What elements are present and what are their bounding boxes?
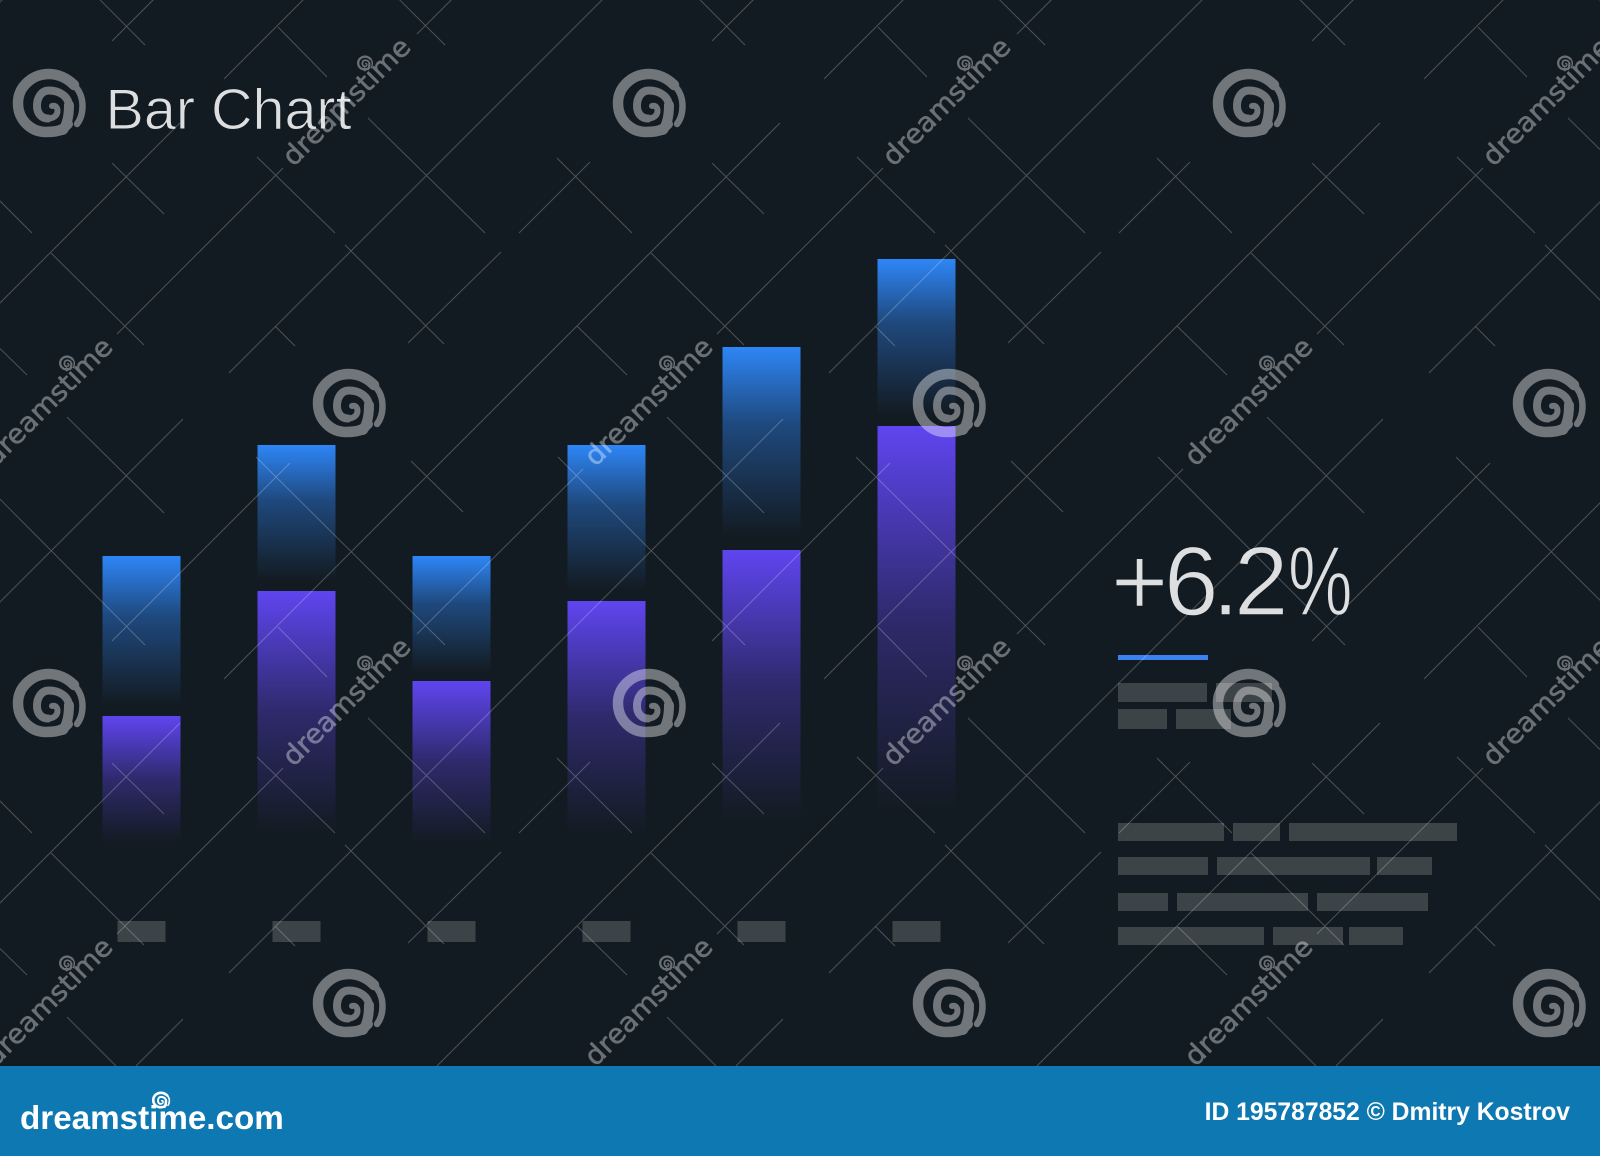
watermark wordmarks: dreamstime — [277, 32, 417, 172]
bar group 6 — [878, 259, 956, 810]
footer logo text: dreamstime.com — [20, 1100, 284, 1137]
placeholder paragraph text — [1118, 823, 1457, 945]
percentage value: % — [1288, 527, 1352, 637]
footer logo icon — [153, 1093, 169, 1107]
footer banner — [0, 1066, 1600, 1156]
watermark wordmarks: dreamstime — [579, 332, 719, 472]
bar chart — [102, 259, 956, 842]
watermark wordmarks: dreamstime — [277, 632, 417, 772]
bar group 1 — [102, 556, 180, 842]
bar group 3 — [412, 556, 490, 842]
watermark wordmarks: dreamstime — [579, 932, 719, 1072]
percentage value: +6.2 — [1111, 526, 1289, 636]
title: Bar Chart — [106, 78, 352, 142]
watermark wordmarks: dreamstime — [1179, 932, 1319, 1072]
bar group 5 — [722, 347, 800, 820]
watermark wordmarks: dreamstime — [1179, 332, 1319, 472]
bar group 2 — [258, 445, 336, 832]
footer image credit: ID 195787852 © Dmitry Kostrov — [1205, 1099, 1570, 1126]
watermark wordmarks: dreamstime — [877, 632, 1017, 772]
placeholder subheading text — [1118, 683, 1272, 729]
blue accent line — [1118, 655, 1208, 660]
watermark wordmarks: dreamstime — [877, 32, 1017, 172]
x axis placeholder labels — [118, 921, 940, 942]
bar group 4 — [568, 445, 646, 832]
